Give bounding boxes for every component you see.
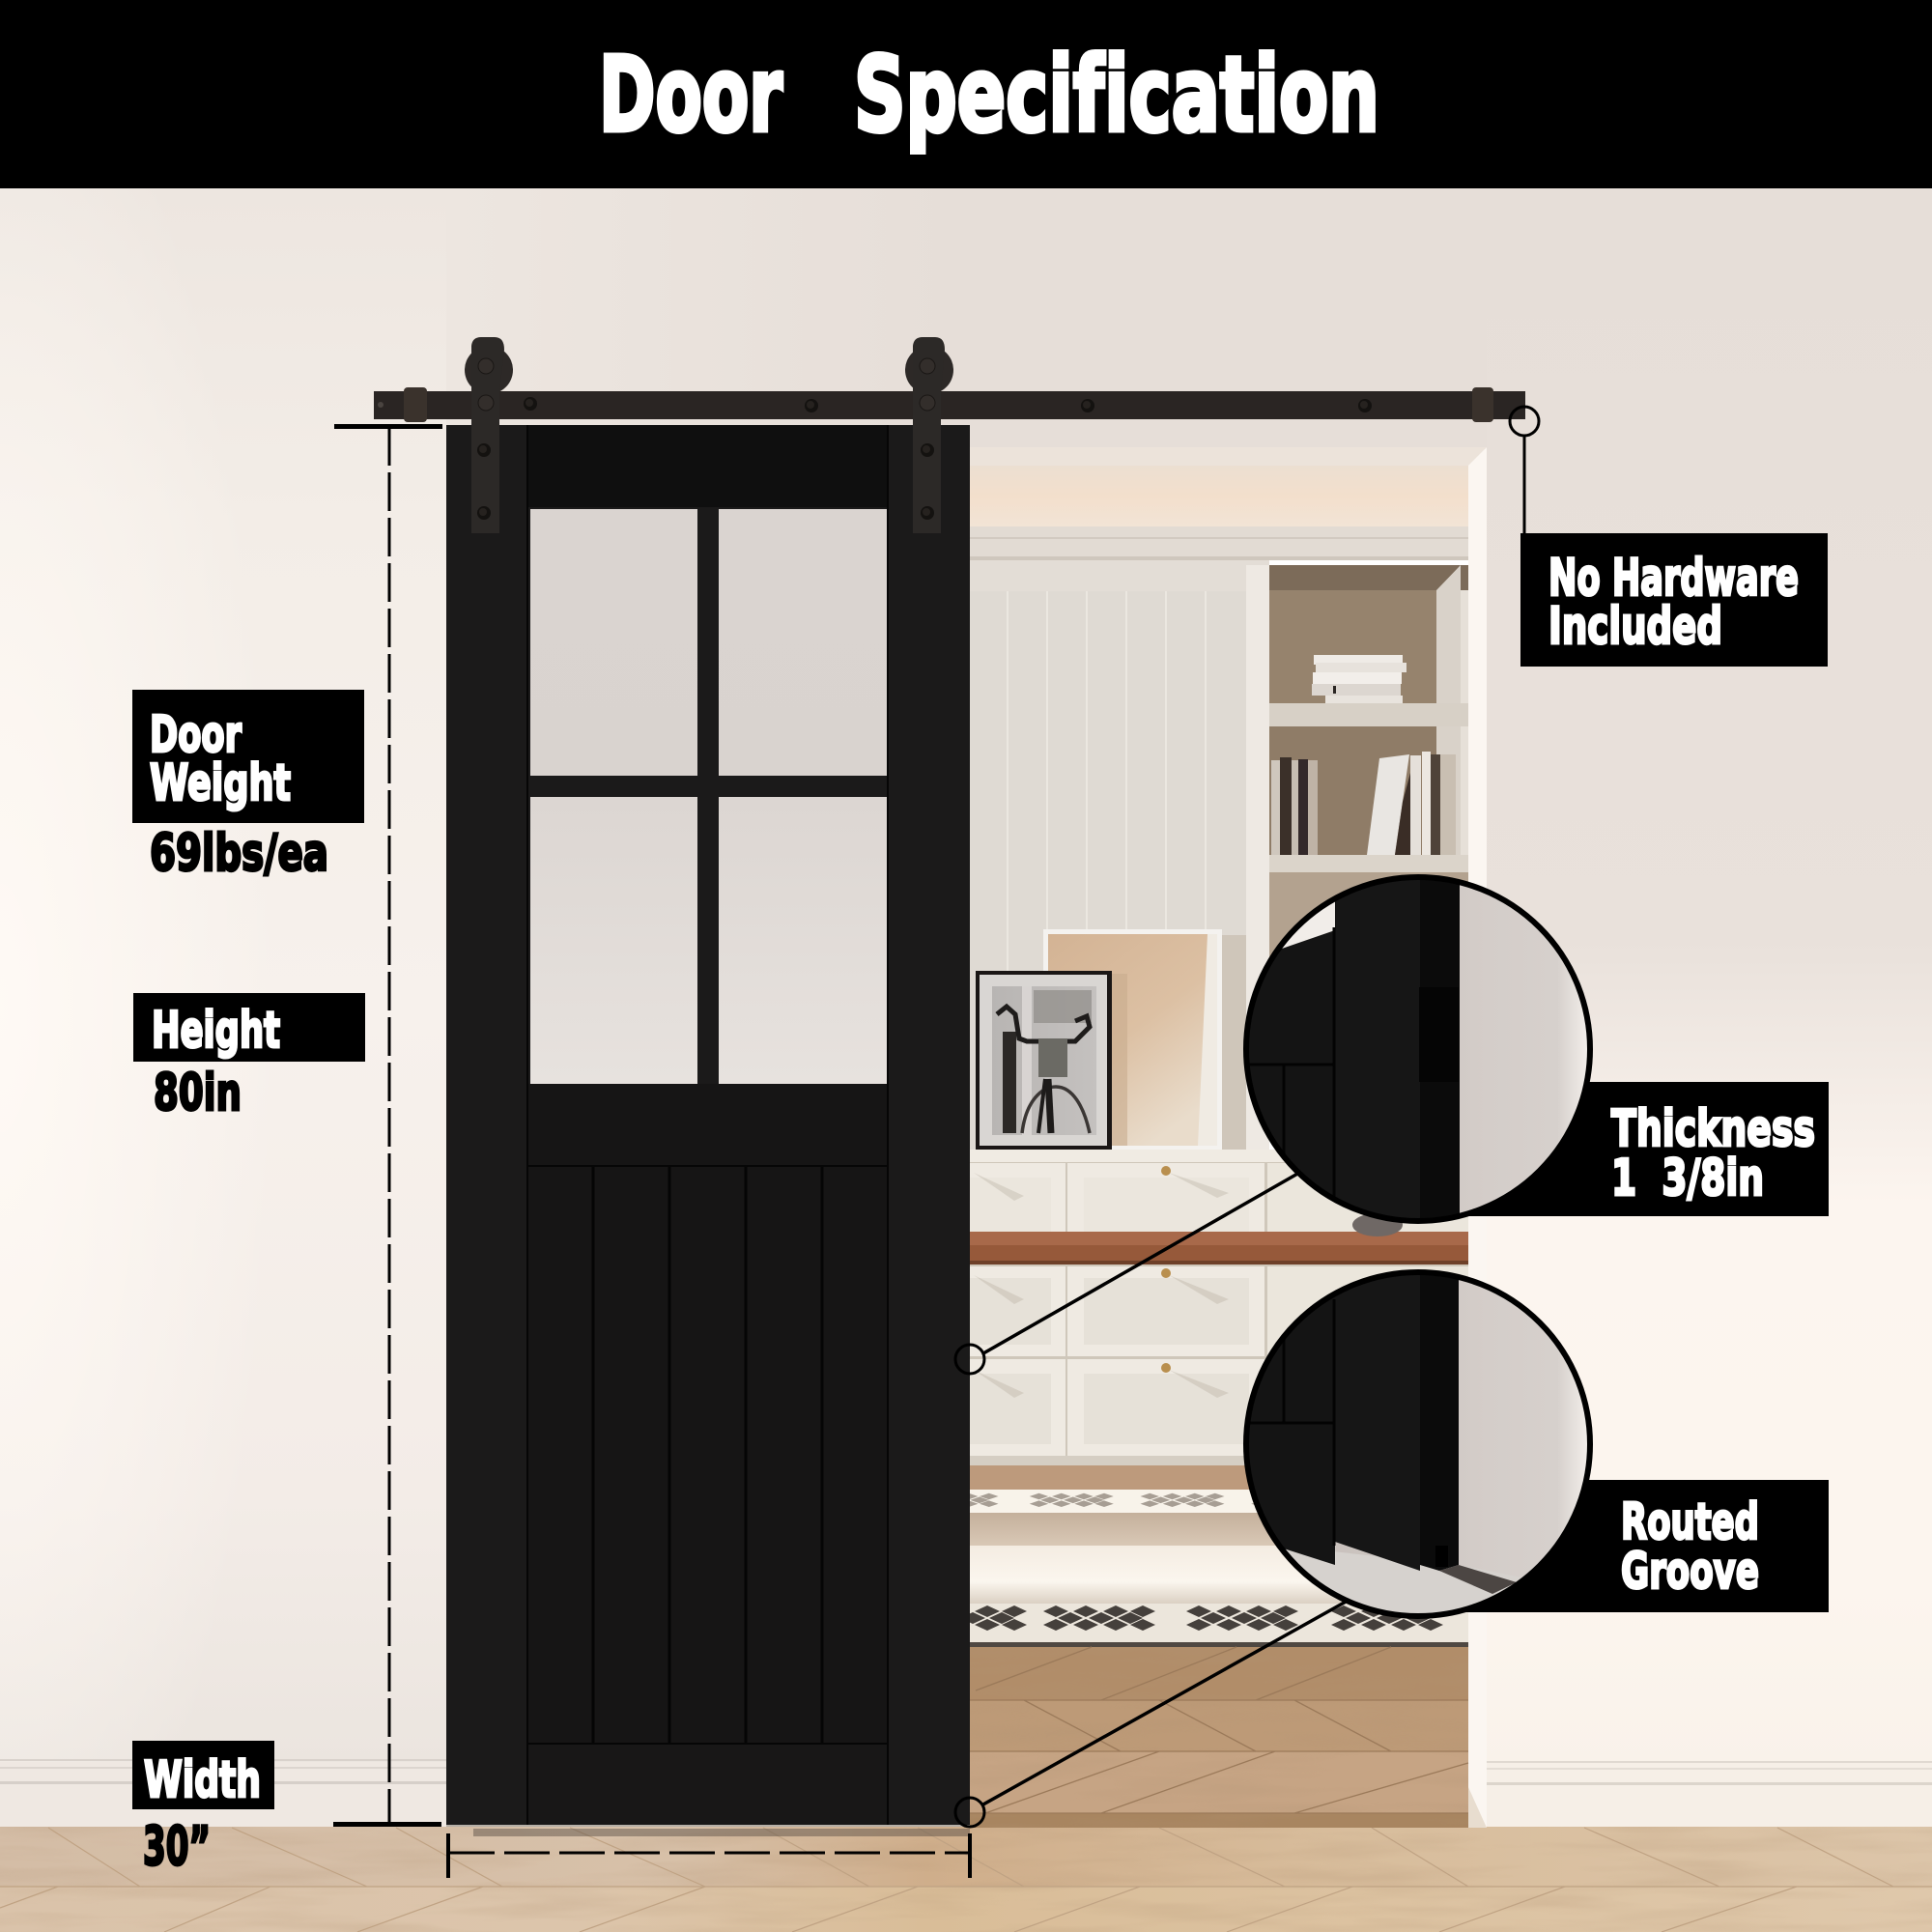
label: height: Height [152,1002,280,1060]
magnifier: routed groove [1244,1270,1604,1623]
left hanger [465,337,513,533]
height dimension line [333,424,442,1827]
cabinet doors [970,1162,1468,1465]
track rail [374,391,1525,419]
inner floor and rug [914,1465,1468,1647]
title bar [0,0,1932,188]
label: width: Width [144,1751,261,1809]
counter top [970,1150,1468,1162]
crown moulding [970,526,1468,560]
casing [1468,447,1487,1828]
baseboard left [0,1759,446,1828]
callout: thickness [1449,1082,1829,1216]
beige art print [1043,929,1246,1150]
upright books [1271,752,1456,855]
label: width: 30” [143,1815,211,1877]
top rail [527,425,887,507]
callout: no hardware included [1510,407,1828,667]
label: width [132,1741,274,1877]
leader line: routed groove [955,1601,1348,1827]
barn door rail hardware [374,337,1525,533]
label: height [133,993,365,1122]
label: door weight: 69lbs/ea [150,824,328,883]
leader line: thickness [955,1173,1299,1374]
callout: thickness: 1 3/8in [1611,1150,1764,1208]
rail stoppers [404,387,1493,422]
door shadow on floor [473,1829,970,1836]
label: door weight [132,690,364,883]
title text second word: Specification [854,36,1379,156]
callout: routed groove: Groove [1621,1543,1759,1601]
stacked books [1312,655,1406,703]
magnifier: door edge thickness [1244,875,1592,1223]
casing reveal [970,447,1487,466]
title text: Door [599,36,782,156]
middle rail [528,1084,888,1167]
width dimension line [446,1833,972,1878]
tongue and groove planks [528,1167,888,1744]
ceiling glow [970,466,1468,527]
bookshelf [1269,565,1468,1056]
rail bolts [378,397,1372,412]
callout: no hardware included: Included [1548,597,1722,656]
callout: routed groove: Routed [1621,1493,1759,1551]
right hanger [905,337,953,533]
label: door weight: Weight [150,754,291,812]
bottom rail [527,1744,888,1826]
panelled wall [970,560,1269,1151]
glass panes [530,509,888,1084]
callout: no hardware included: No Hardware [1548,549,1799,608]
callout: routed groove [1449,1480,1829,1612]
label: door weight: Door [150,706,242,764]
label: height: 80in [154,1064,242,1122]
baseboard right [1487,1761,1932,1828]
callout: thickness: Thickness [1611,1100,1815,1158]
herringbone floor inside [970,1647,1468,1828]
wood shelf [970,1232,1468,1264]
bicycle photo frame [976,971,1112,1150]
barn door [446,425,970,1826]
room seen through doorway [914,447,1487,1828]
outer floor [0,1827,1932,1932]
small stone object on shelf [1352,1213,1403,1236]
